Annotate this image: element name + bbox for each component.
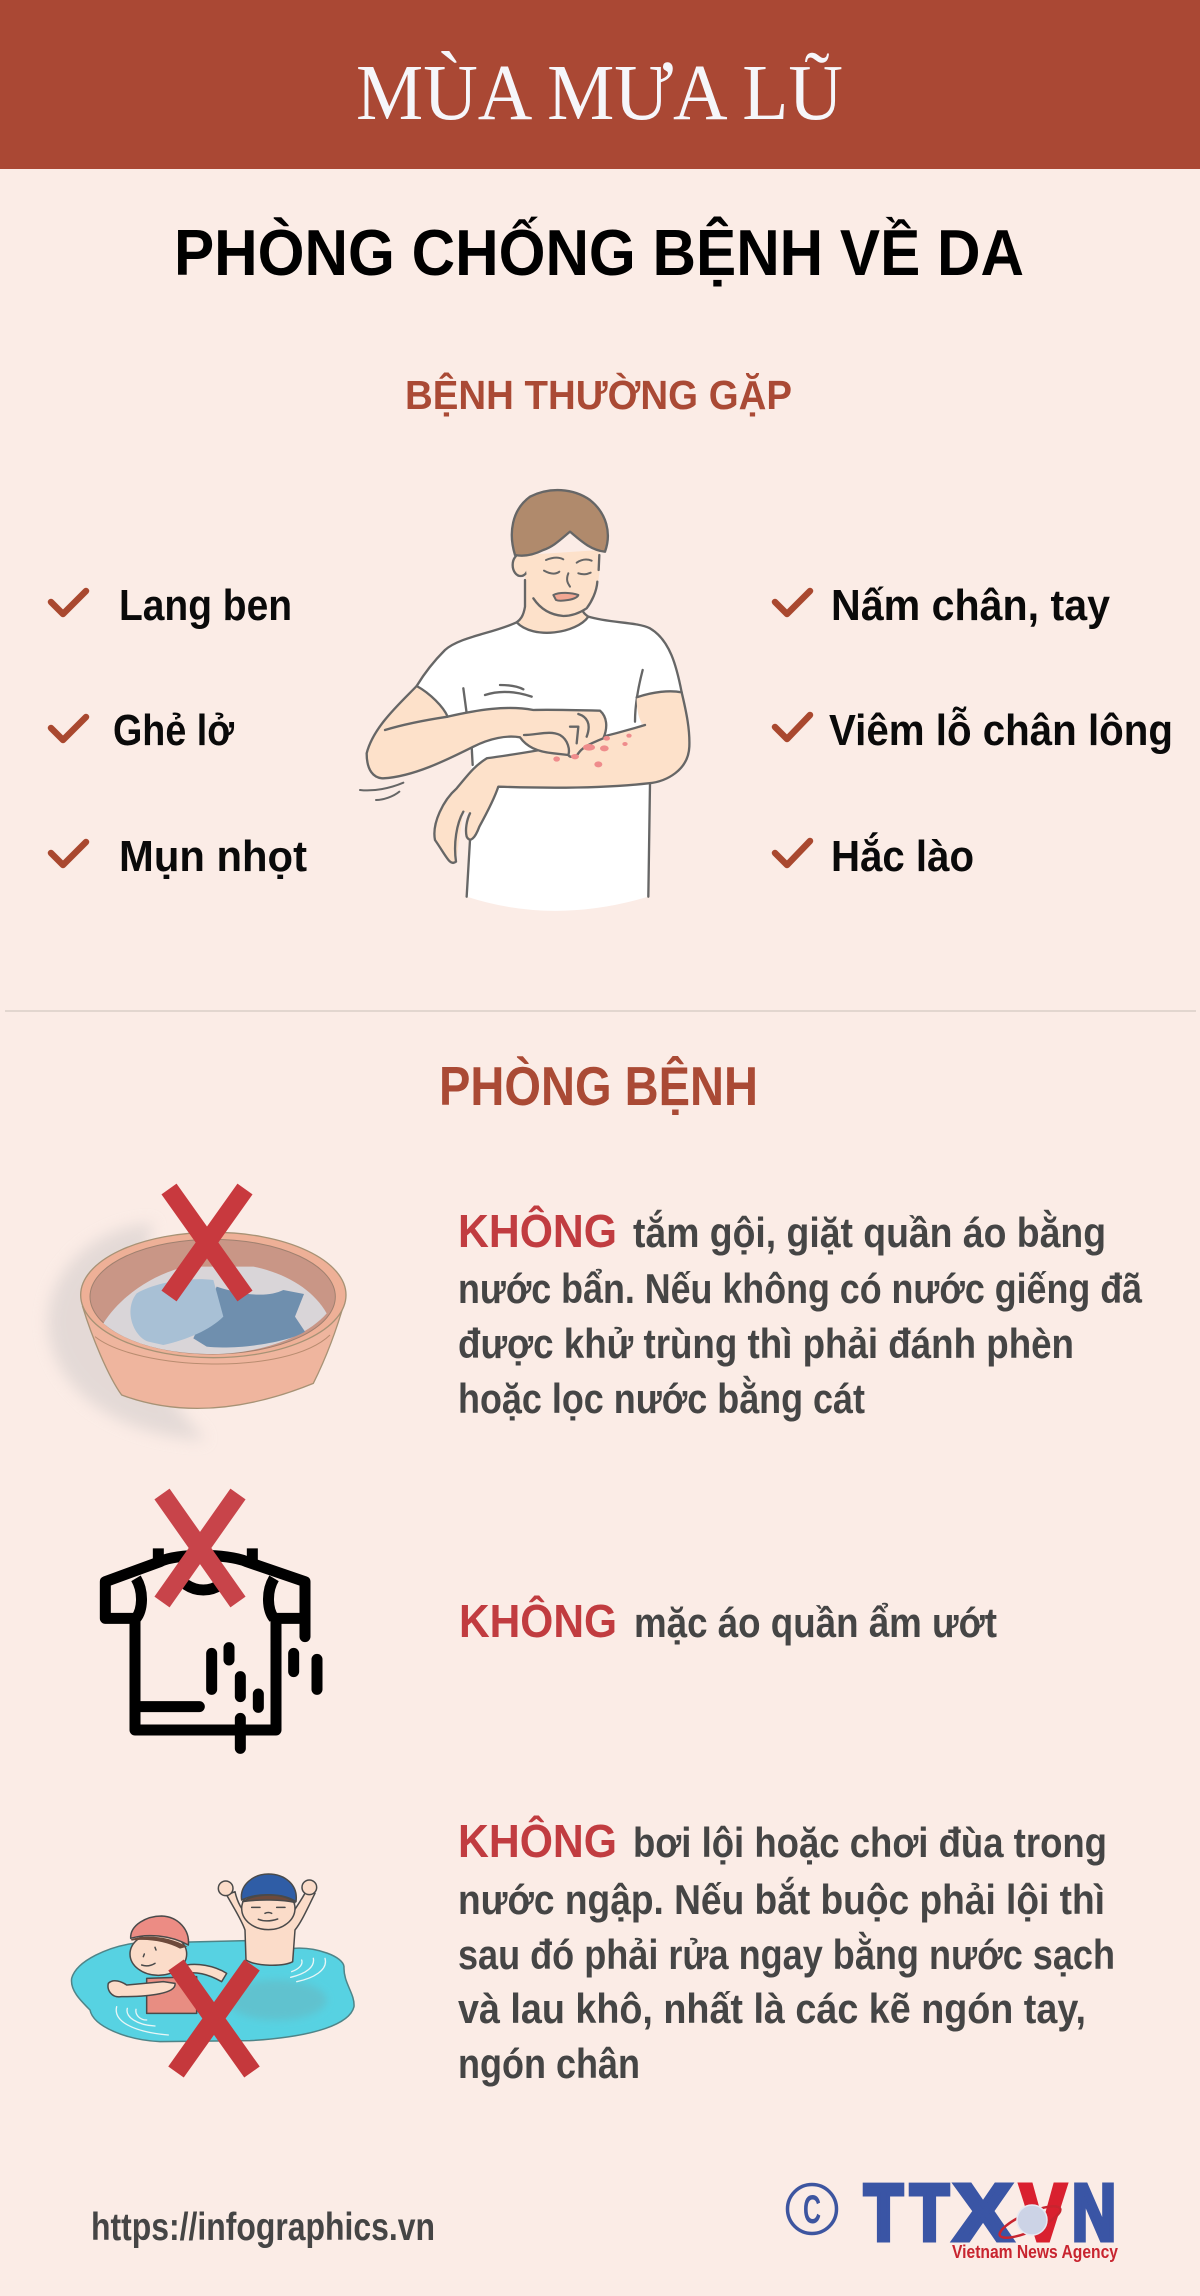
item: Hắc lào bbox=[775, 831, 974, 881]
text: no wading in flood: KHÔNG bbox=[458, 1815, 617, 1867]
text: no wet clothes: KHÔNG bbox=[459, 1595, 617, 1647]
text: no dirty water: KHÔNG bbox=[458, 1205, 617, 1257]
item: Mụn nhọt: Mụn nhọt bbox=[119, 832, 307, 881]
illustration: children in flood water bbox=[71, 1874, 354, 2072]
header banner bbox=[0, 0, 1200, 169]
agency name: Vietnam News Agency bbox=[952, 2242, 1118, 2262]
icon: wet shirt bbox=[105, 1494, 317, 1748]
item: Viêm lỗ chân lông: Viêm lỗ chân lông bbox=[829, 705, 1173, 755]
text: no dirty water: tắm gội, giặt quần áo bằng bbox=[633, 1208, 1106, 1256]
logo: TTXVN: X bbox=[954, 2168, 1012, 2257]
text: no wet clothes bbox=[459, 1595, 997, 1647]
divider bbox=[5, 1010, 1196, 1012]
icon: copyright: C bbox=[803, 2188, 821, 2232]
logo: TTXVN bbox=[864, 2168, 1118, 2262]
title: MÙA MƯA LŨ bbox=[356, 50, 843, 137]
logo: TTXVN: T bbox=[864, 2168, 903, 2257]
text: no dirty water bbox=[458, 1205, 1143, 1422]
logo: TTXVN: V bbox=[1020, 2168, 1066, 2257]
item: Ghẻ lở bbox=[51, 706, 235, 755]
text: no wet clothes: mặc áo quần ẩm ướt bbox=[634, 1599, 997, 1646]
item: Lang ben: Lang ben bbox=[119, 581, 292, 630]
red cross bbox=[169, 1189, 245, 1296]
illustration: washing basin with dirty water bbox=[48, 1189, 346, 1440]
item: Ghẻ lở: Ghẻ lở bbox=[113, 706, 235, 755]
logo: TTXVN: T bbox=[910, 2168, 949, 2257]
item: Nấm chân, tay: Nấm chân, tay bbox=[831, 581, 1110, 630]
icon: copyright bbox=[788, 2184, 836, 2234]
text: no wading in flood: bơi lội hoặc chơi đùa trong bbox=[633, 1819, 1107, 1866]
red cross bbox=[176, 1965, 252, 2072]
text: no wading in flood bbox=[458, 1815, 1115, 2087]
panel: left disease list bbox=[51, 581, 307, 881]
text: no dirty water: được khử trùng thì phải đánh phèn bbox=[458, 1320, 1074, 1367]
text: no dirty water: hoặc lọc nước bằng cát bbox=[458, 1374, 865, 1422]
heading: common diseases: BỆNH THƯỜNG GẶP bbox=[405, 372, 792, 418]
logo: TTXVN: N bbox=[1072, 2168, 1116, 2257]
text: no wading in flood: ngón chân bbox=[458, 2040, 640, 2087]
heading: prevention: PHÒNG BỆNH bbox=[439, 1055, 758, 1117]
footer url: https://infographics.vn bbox=[91, 2206, 435, 2249]
panel: right disease list bbox=[775, 581, 1173, 881]
text: no wading in flood: nước ngập. Nếu bắt buộc phải lội thì bbox=[458, 1875, 1105, 1923]
red cross bbox=[162, 1494, 238, 1602]
item: Hắc lào: Hắc lào bbox=[831, 831, 974, 881]
item: Lang ben bbox=[51, 581, 292, 630]
subtitle: PHÒNG CHỐNG BỆNH VỀ DA bbox=[174, 216, 1024, 289]
text: no wading in flood: và lau khô, nhất là các kẽ ngón tay, bbox=[458, 1985, 1086, 2032]
illustration: man scratching arm bbox=[360, 490, 689, 911]
